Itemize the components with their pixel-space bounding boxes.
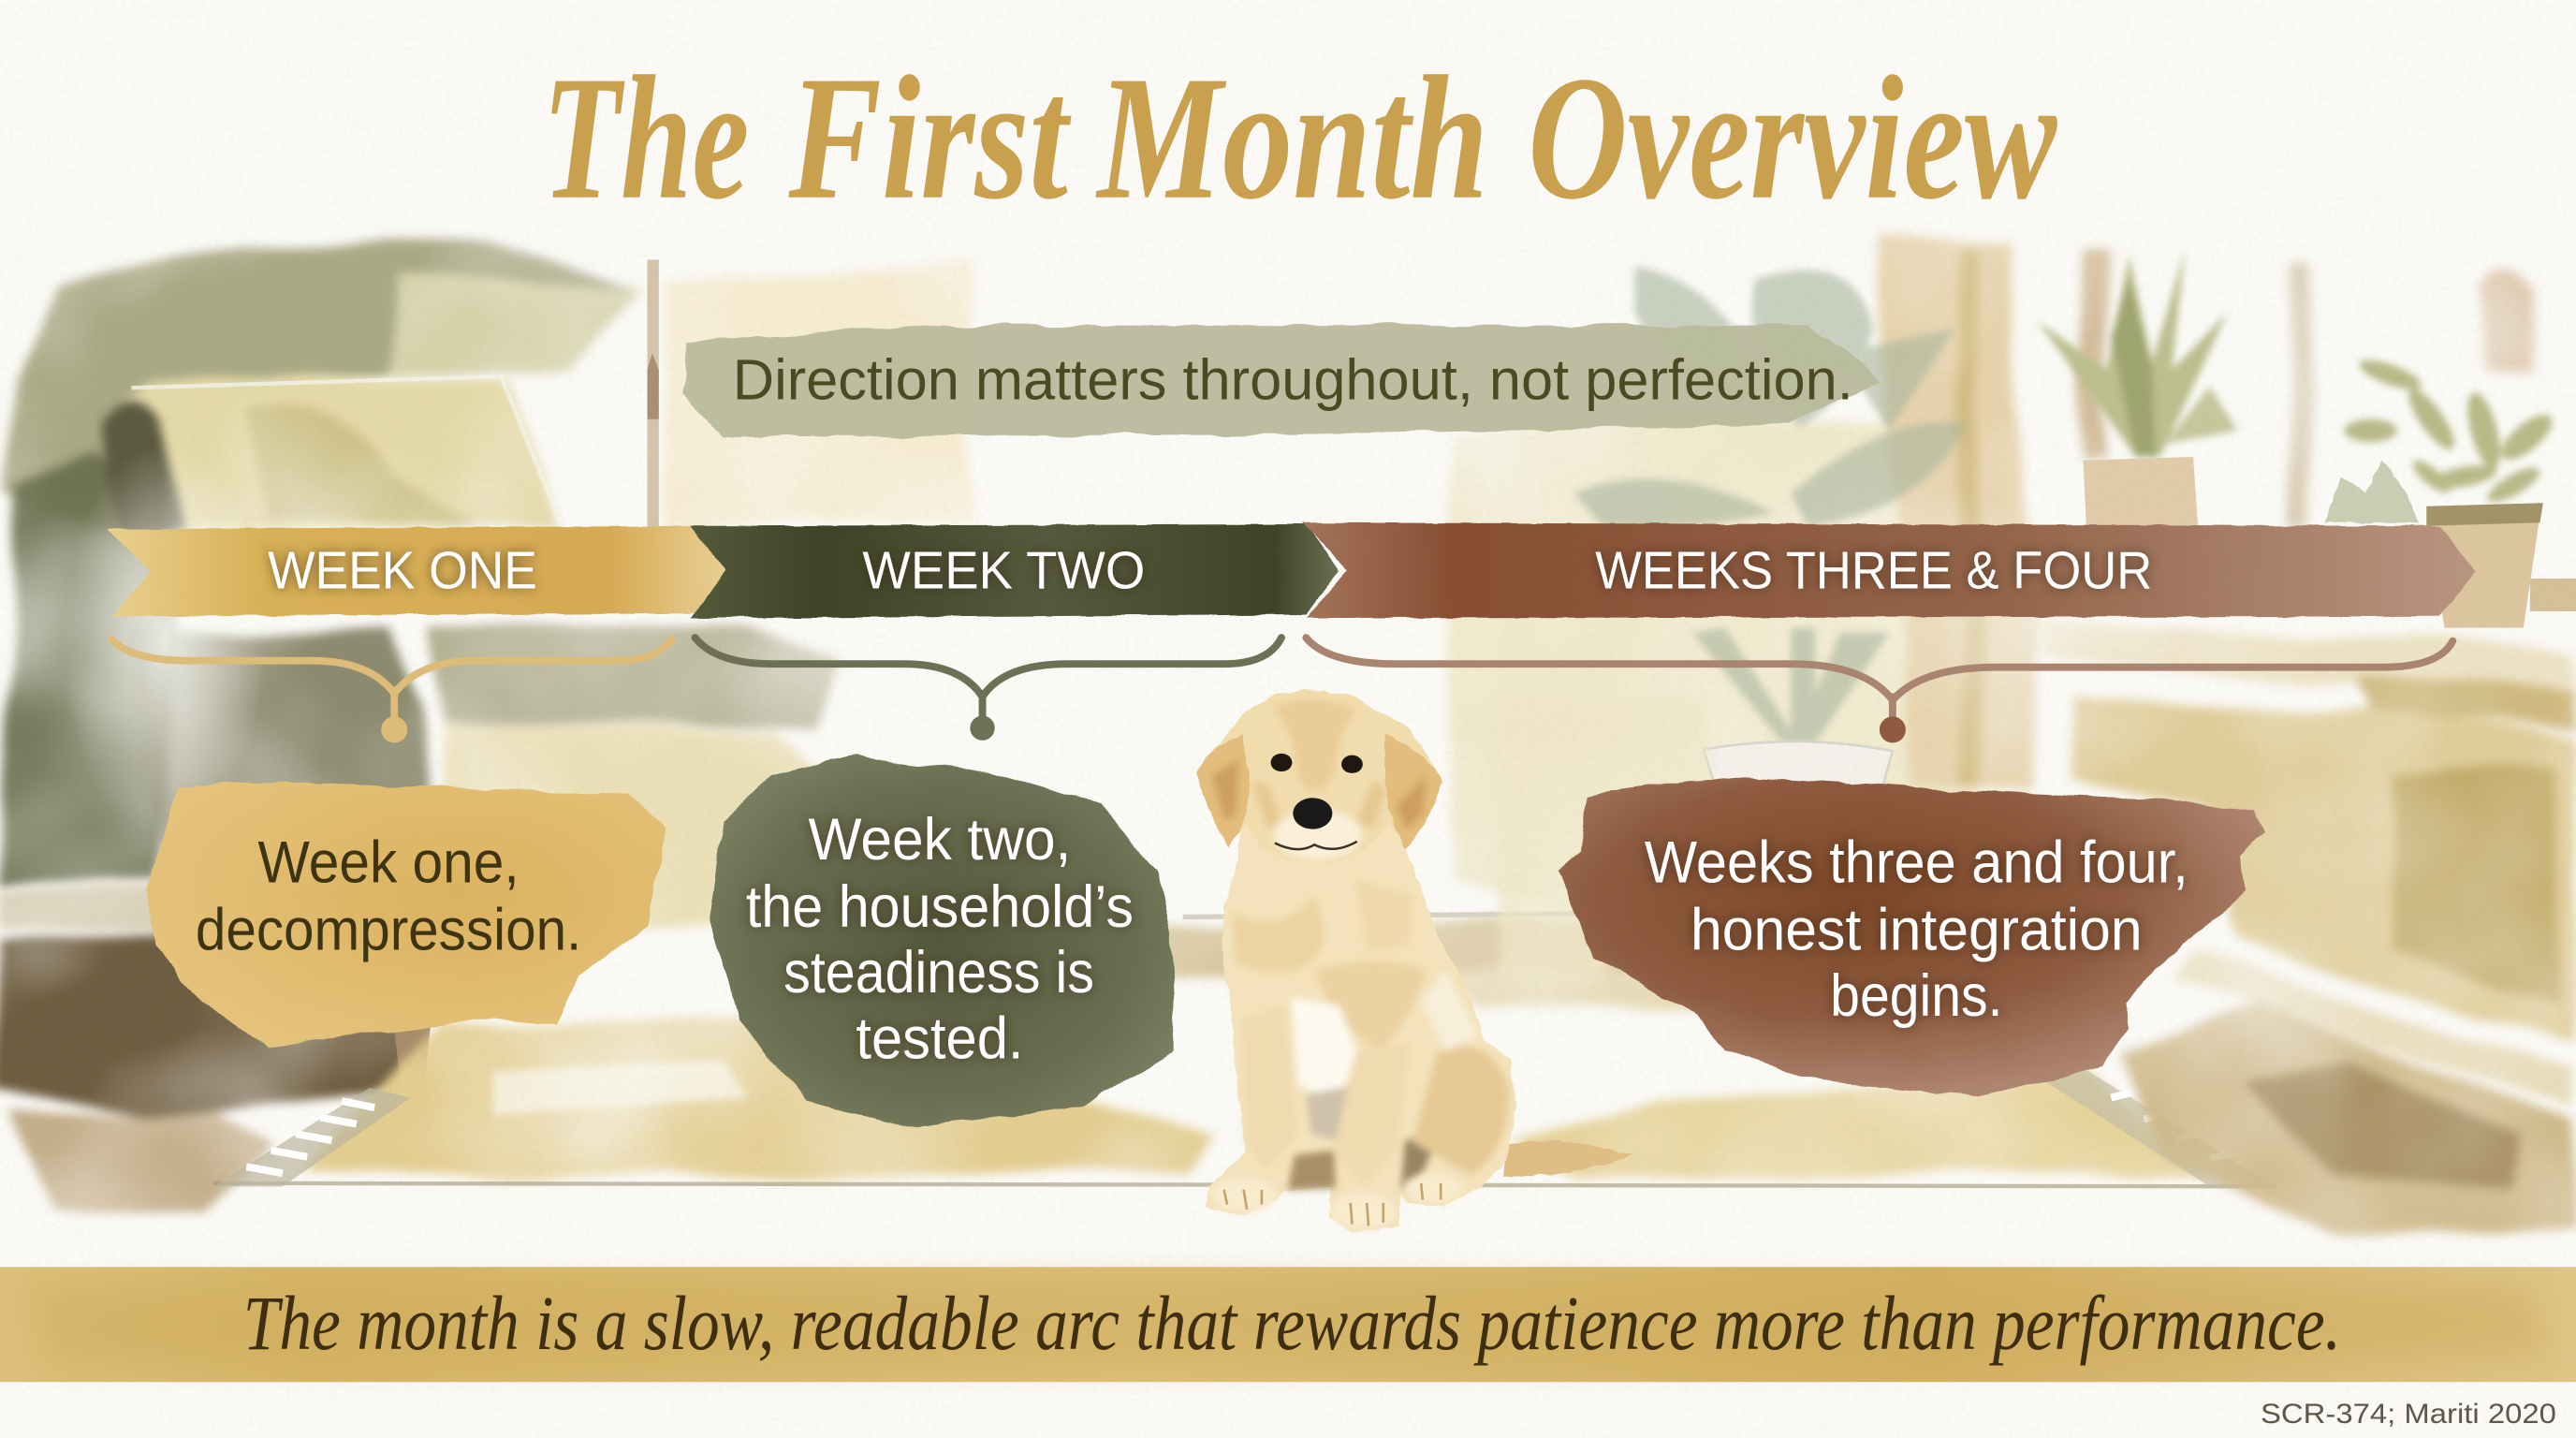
banner: weeks three and four bbox=[1303, 522, 2476, 618]
puppy nose bbox=[1293, 798, 1332, 829]
weeks three and four text bbox=[1645, 830, 2188, 1029]
baseboard line bbox=[1183, 914, 1577, 917]
banner: week one bbox=[107, 526, 735, 616]
blob: week two bbox=[710, 756, 1178, 1127]
bottom takeaway strip bbox=[0, 1267, 2576, 1382]
chair leg bbox=[394, 1027, 431, 1088]
puppy head shading bbox=[1251, 699, 1386, 859]
title: Overview bbox=[1528, 40, 2058, 237]
right wall wash bbox=[2029, 628, 2576, 1236]
spiky plant with pot bbox=[2037, 250, 2237, 529]
bracket: week one bbox=[111, 639, 672, 742]
week two text: Week two, bbox=[809, 807, 1071, 873]
weeks three and four label: WEEKS THREE & FOUR bbox=[1595, 540, 2152, 599]
cream wash behind blob bbox=[1499, 698, 1704, 983]
puppy ear shading bbox=[1212, 759, 1426, 829]
title: Month bbox=[1095, 40, 1488, 237]
puppy shading bbox=[1232, 879, 1508, 1190]
rug edge and fringe bbox=[213, 1068, 2276, 1186]
rug highlight bbox=[493, 1060, 748, 1114]
bracket: weeks three and four bbox=[1306, 638, 2452, 742]
puppy tail bbox=[1503, 1141, 1632, 1177]
large sage plant bbox=[1573, 266, 1967, 742]
weeks three and four text: begins. bbox=[1830, 963, 2002, 1029]
week one text bbox=[196, 830, 581, 963]
small sage plant bbox=[2324, 461, 2419, 522]
direction text: Direction matters throughout, not perfection. bbox=[733, 348, 1853, 413]
puppy right ear bbox=[1385, 735, 1442, 850]
title bbox=[542, 40, 2058, 237]
armchair back bbox=[109, 374, 562, 529]
blob: weeks three and four bbox=[1559, 776, 2267, 1096]
centre wall and baseboard bbox=[1134, 411, 1980, 1011]
leafy plant with pot bbox=[2345, 354, 2576, 628]
puppy paws bbox=[1211, 1173, 1462, 1229]
title: The bbox=[542, 40, 749, 237]
window frames bbox=[1878, 233, 2530, 785]
title: First bbox=[788, 40, 1072, 237]
week two text bbox=[746, 807, 1134, 1071]
bracket: week two bbox=[695, 638, 1281, 741]
puppy eyes bbox=[1271, 754, 1363, 773]
armchair body bbox=[0, 624, 829, 937]
week two text: tested. bbox=[856, 1005, 1023, 1071]
lamp pole bbox=[648, 259, 659, 529]
puppy left ear bbox=[1196, 735, 1251, 848]
armchair outline bbox=[131, 376, 562, 526]
weeks three and four text: honest integration bbox=[1690, 898, 2143, 963]
puppy body bbox=[1206, 822, 1516, 1232]
fog beside banner bbox=[63, 444, 266, 838]
puppy illustration bbox=[1196, 690, 1632, 1232]
weeks three and four text: Weeks three and four, bbox=[1645, 830, 2188, 896]
blob: week one bbox=[146, 783, 666, 1049]
banner: week two bbox=[690, 524, 1339, 618]
source citation: SCR-374; Mariti 2020 bbox=[2261, 1399, 2556, 1430]
wall wash left bbox=[0, 240, 970, 526]
white plant pot bbox=[1704, 741, 1893, 792]
direction band bbox=[681, 326, 1882, 437]
week two label: WEEK TWO bbox=[862, 540, 1145, 599]
week one text: decompression. bbox=[196, 898, 581, 963]
dark olive column left bbox=[0, 448, 172, 883]
week one text: Week one, bbox=[258, 830, 520, 896]
floor left bbox=[0, 933, 417, 1212]
week one label: WEEK ONE bbox=[268, 540, 537, 599]
puppy toes bbox=[1224, 1183, 1441, 1225]
puppy ears and head bbox=[1196, 690, 1442, 864]
puppy mouth bbox=[1275, 842, 1357, 849]
week two text: steadiness is bbox=[783, 940, 1094, 1005]
rug bbox=[304, 1016, 2210, 1177]
week two text: the household’s bbox=[746, 874, 1134, 940]
